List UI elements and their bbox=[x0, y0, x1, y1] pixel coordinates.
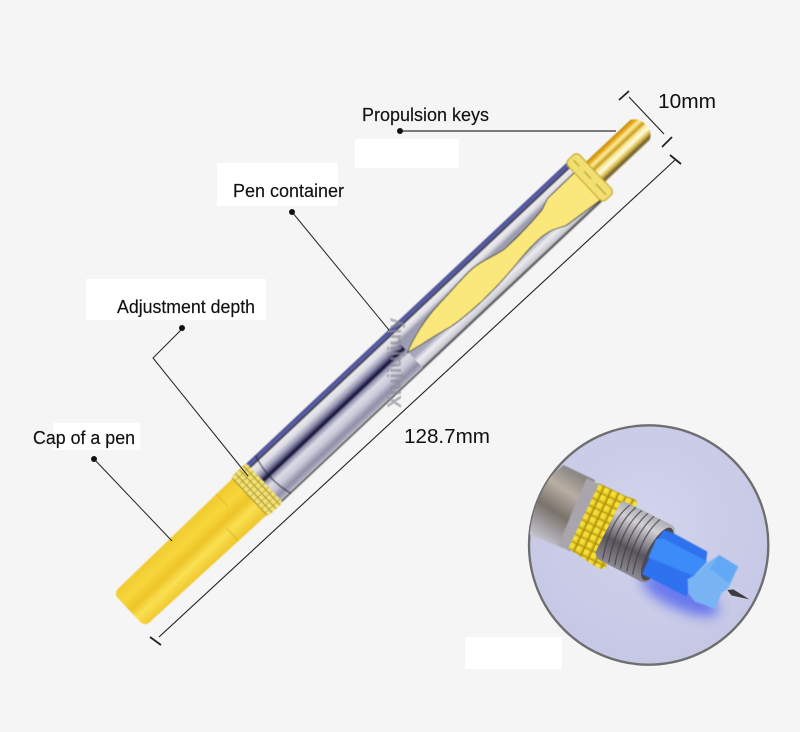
label: pen container: Pen container bbox=[233, 181, 344, 201]
inset blue shadow bbox=[635, 578, 725, 624]
cap notch bbox=[204, 494, 250, 541]
inset threaded collar bbox=[596, 501, 675, 582]
dimension: 10mm bbox=[619, 91, 672, 147]
top ring bbox=[565, 152, 614, 203]
label: propulsion keys: Propulsion keys bbox=[362, 105, 489, 125]
leader: propulsion keys bbox=[397, 128, 616, 134]
label: 128.7mm: 128.7mm bbox=[404, 425, 490, 448]
pen illustration bbox=[110, 105, 665, 630]
leader: adjustment depth bbox=[153, 325, 248, 476]
label: cap of a pen: Cap of a pen bbox=[33, 428, 135, 448]
inset needle nib bbox=[727, 589, 749, 599]
body section arc bbox=[253, 456, 291, 496]
inset gold ring bbox=[568, 483, 637, 569]
leader: cap of a pen bbox=[91, 456, 172, 541]
white patches bbox=[53, 139, 562, 669]
inset: nib close-up bbox=[520, 425, 768, 665]
inset metal barrel bbox=[530, 464, 596, 548]
propulsion button bbox=[583, 114, 655, 185]
leader: pen container bbox=[289, 209, 389, 330]
label: 10mm: 10mm bbox=[658, 90, 716, 113]
inset collar opening bbox=[641, 528, 674, 580]
watermark: Xiujiujiuly bbox=[385, 318, 406, 408]
inset blue holder bbox=[642, 530, 738, 609]
dimension: 128.7mm bbox=[150, 155, 681, 645]
infographic: pen dimensions diagram bbox=[34, 90, 770, 669]
pen container upper body bbox=[388, 162, 603, 369]
adjustment ring bbox=[231, 463, 283, 517]
pen container lower body bbox=[245, 330, 425, 503]
cap of a pen bbox=[112, 478, 267, 628]
yellow inlay bbox=[396, 172, 601, 368]
inset barrel band bbox=[558, 478, 602, 552]
label: adjustment depth: Adjustment depth bbox=[117, 297, 255, 317]
